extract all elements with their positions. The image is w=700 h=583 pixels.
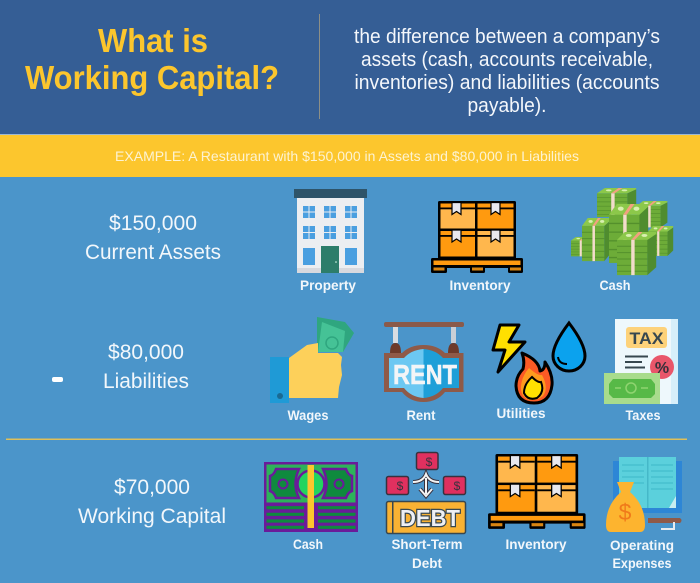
icon: tax document bbox=[604, 319, 678, 404]
label: inventory: Inventory bbox=[506, 536, 567, 552]
icon: utilities bolt drop flame bbox=[493, 323, 585, 403]
working capital text: Working Capital bbox=[78, 505, 226, 528]
label: short-term debt: Debt bbox=[412, 555, 442, 571]
icon: rent sign bbox=[384, 322, 464, 402]
example band: EXAMPLE: A Restaurant with $150,000 in Assets and $80,000 in Liabilities bbox=[115, 148, 579, 164]
label: cash: Cash bbox=[600, 277, 630, 293]
icon: operating expenses book and money bag: $ bbox=[619, 499, 632, 525]
working capital text: $70,000 bbox=[114, 476, 190, 499]
liabilities text bbox=[103, 341, 189, 393]
definition text bbox=[354, 26, 660, 117]
label: inventory: Inventory bbox=[450, 277, 511, 293]
icon: tax document: TAX bbox=[630, 329, 664, 348]
definition text: payable). bbox=[468, 95, 546, 117]
icon: short-term debt: $ bbox=[397, 479, 404, 493]
definition text: inventories) and liabilities (accounts bbox=[354, 72, 660, 94]
current assets text: $150,000 bbox=[109, 212, 197, 235]
current assets text: Current Assets bbox=[85, 241, 221, 264]
label: taxes: Taxes bbox=[626, 407, 661, 423]
icon: inventory pallet bbox=[488, 454, 586, 529]
icon: cash bundle bbox=[264, 462, 358, 532]
icon: short-term debt: $ bbox=[454, 479, 461, 493]
label: property: Property bbox=[300, 277, 356, 293]
label: rent: Rent bbox=[406, 407, 436, 423]
icon: cash stacks bbox=[571, 188, 673, 275]
icon: short-term debt: DEBT bbox=[400, 505, 460, 531]
liabilities text: $80,000 bbox=[108, 341, 184, 364]
icon: tax document: % bbox=[655, 360, 669, 377]
header panel bbox=[0, 0, 700, 134]
icon: short-term debt: $ bbox=[426, 455, 433, 469]
icon: property building bbox=[294, 189, 367, 273]
label: wages: Wages bbox=[288, 407, 329, 423]
working capital text bbox=[78, 476, 226, 528]
example band bbox=[0, 134, 700, 177]
icon: wages hand with money bbox=[270, 317, 354, 403]
label: short-term debt: Short-Term bbox=[392, 536, 462, 552]
title: What is bbox=[98, 22, 208, 59]
icon: operating expenses book and money bag bbox=[606, 457, 682, 532]
label: operating expenses bbox=[610, 537, 674, 571]
label: operating expenses: Operating bbox=[610, 537, 674, 553]
icon: inventory pallet bbox=[431, 201, 523, 273]
current assets text bbox=[85, 212, 221, 264]
definition text: assets (cash, accounts receivable, bbox=[361, 49, 653, 71]
liabilities text: Liabilities bbox=[103, 370, 189, 393]
body panel bbox=[0, 177, 700, 583]
minus sign bbox=[52, 377, 63, 382]
label: short-term debt bbox=[392, 536, 462, 571]
title bbox=[25, 22, 279, 96]
label: utilities: Utilities bbox=[496, 405, 546, 421]
title: Working Capital? bbox=[25, 59, 279, 96]
icon: rent sign: RENT bbox=[393, 359, 457, 390]
label: cash: Cash bbox=[293, 536, 323, 552]
label: operating expenses: Expenses bbox=[612, 555, 672, 571]
definition text: the difference between a company’s bbox=[354, 26, 660, 48]
icon: short-term debt bbox=[386, 452, 466, 534]
